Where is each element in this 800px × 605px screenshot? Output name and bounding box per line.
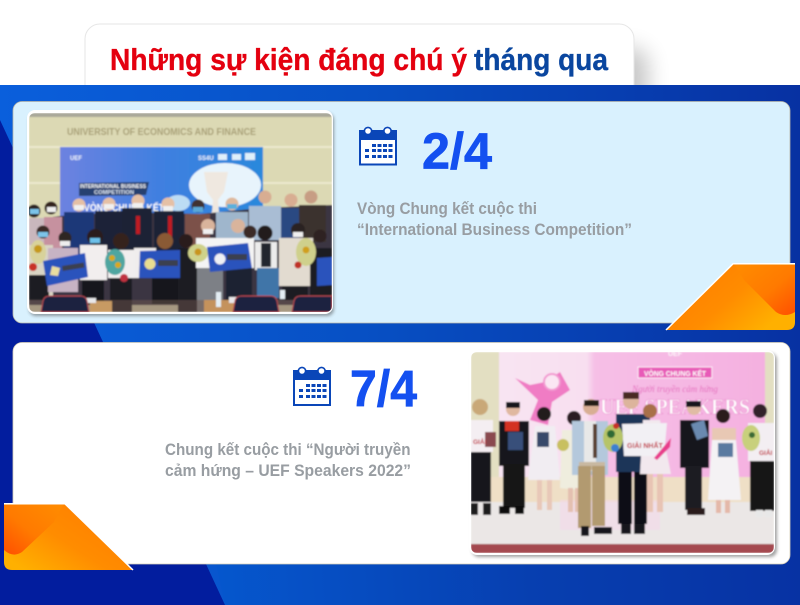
orange corner tab <box>666 264 795 330</box>
event description <box>165 441 411 480</box>
panel: event 2/4 <box>13 102 795 330</box>
photo: UEF Speakers winners: UEF <box>668 351 683 358</box>
date 2/4: 2/4 <box>422 122 493 180</box>
photo: International Business Competition group <box>27 110 334 316</box>
bouquets <box>30 240 46 264</box>
orange corner tab <box>4 504 133 570</box>
event description: cảm hứng – UEF Speakers 2022” <box>165 462 411 480</box>
title: Những sự kiện đáng chú ý <box>110 42 468 77</box>
title: tháng qua <box>474 42 609 77</box>
people <box>471 420 493 452</box>
photo: International Business Competition group: VÒNG CHUNG KẾT <box>84 201 164 214</box>
photo: UEF Speakers winners: GIẢI <box>759 448 773 457</box>
crowd backdrop <box>29 205 332 305</box>
icon: calendar <box>359 127 397 166</box>
photo: UEF Speakers winners: VÒNG CHUNG KẾT <box>644 368 706 378</box>
photo: International Business Competition group: INTERNATIONAL BUSINESS <box>80 184 146 190</box>
back row <box>29 217 45 246</box>
title card <box>84 24 658 85</box>
photo: UEF Speakers winners <box>469 350 777 557</box>
panel 2 background <box>13 342 790 564</box>
photo: UEF Speakers winners: Người truyền cảm hứng <box>631 384 718 394</box>
icon: calendar <box>293 367 331 406</box>
photo: UEF Speakers winners: UEF SPEAKERS <box>600 394 750 419</box>
photo: International Business Competition group: UEF <box>70 156 82 162</box>
event description <box>357 200 632 239</box>
table and chairs <box>29 300 332 312</box>
front row <box>29 245 53 300</box>
panel: event 7/4 <box>4 342 790 570</box>
panel 1 background <box>13 102 790 323</box>
date 7/4: 7/4 <box>350 360 418 417</box>
photo: International Business Competition group: COMPETITION <box>94 190 134 196</box>
posters <box>43 253 88 286</box>
event description: Vòng Chung kết cuộc thi <box>357 200 537 218</box>
photo: International Business Competition group: SS4U <box>198 156 214 162</box>
event description: Chung kết cuộc thi “Người truyền <box>165 441 410 459</box>
event description: “International Business Competition” <box>357 221 632 239</box>
photo: International Business Competition group: UNIVERSITY OF ECONOMICS AND FINANCE <box>67 127 256 138</box>
photo: UEF Speakers winners: GIẢI <box>473 437 487 446</box>
photo: UEF Speakers winners: GIẢI NHẤT <box>627 440 664 450</box>
